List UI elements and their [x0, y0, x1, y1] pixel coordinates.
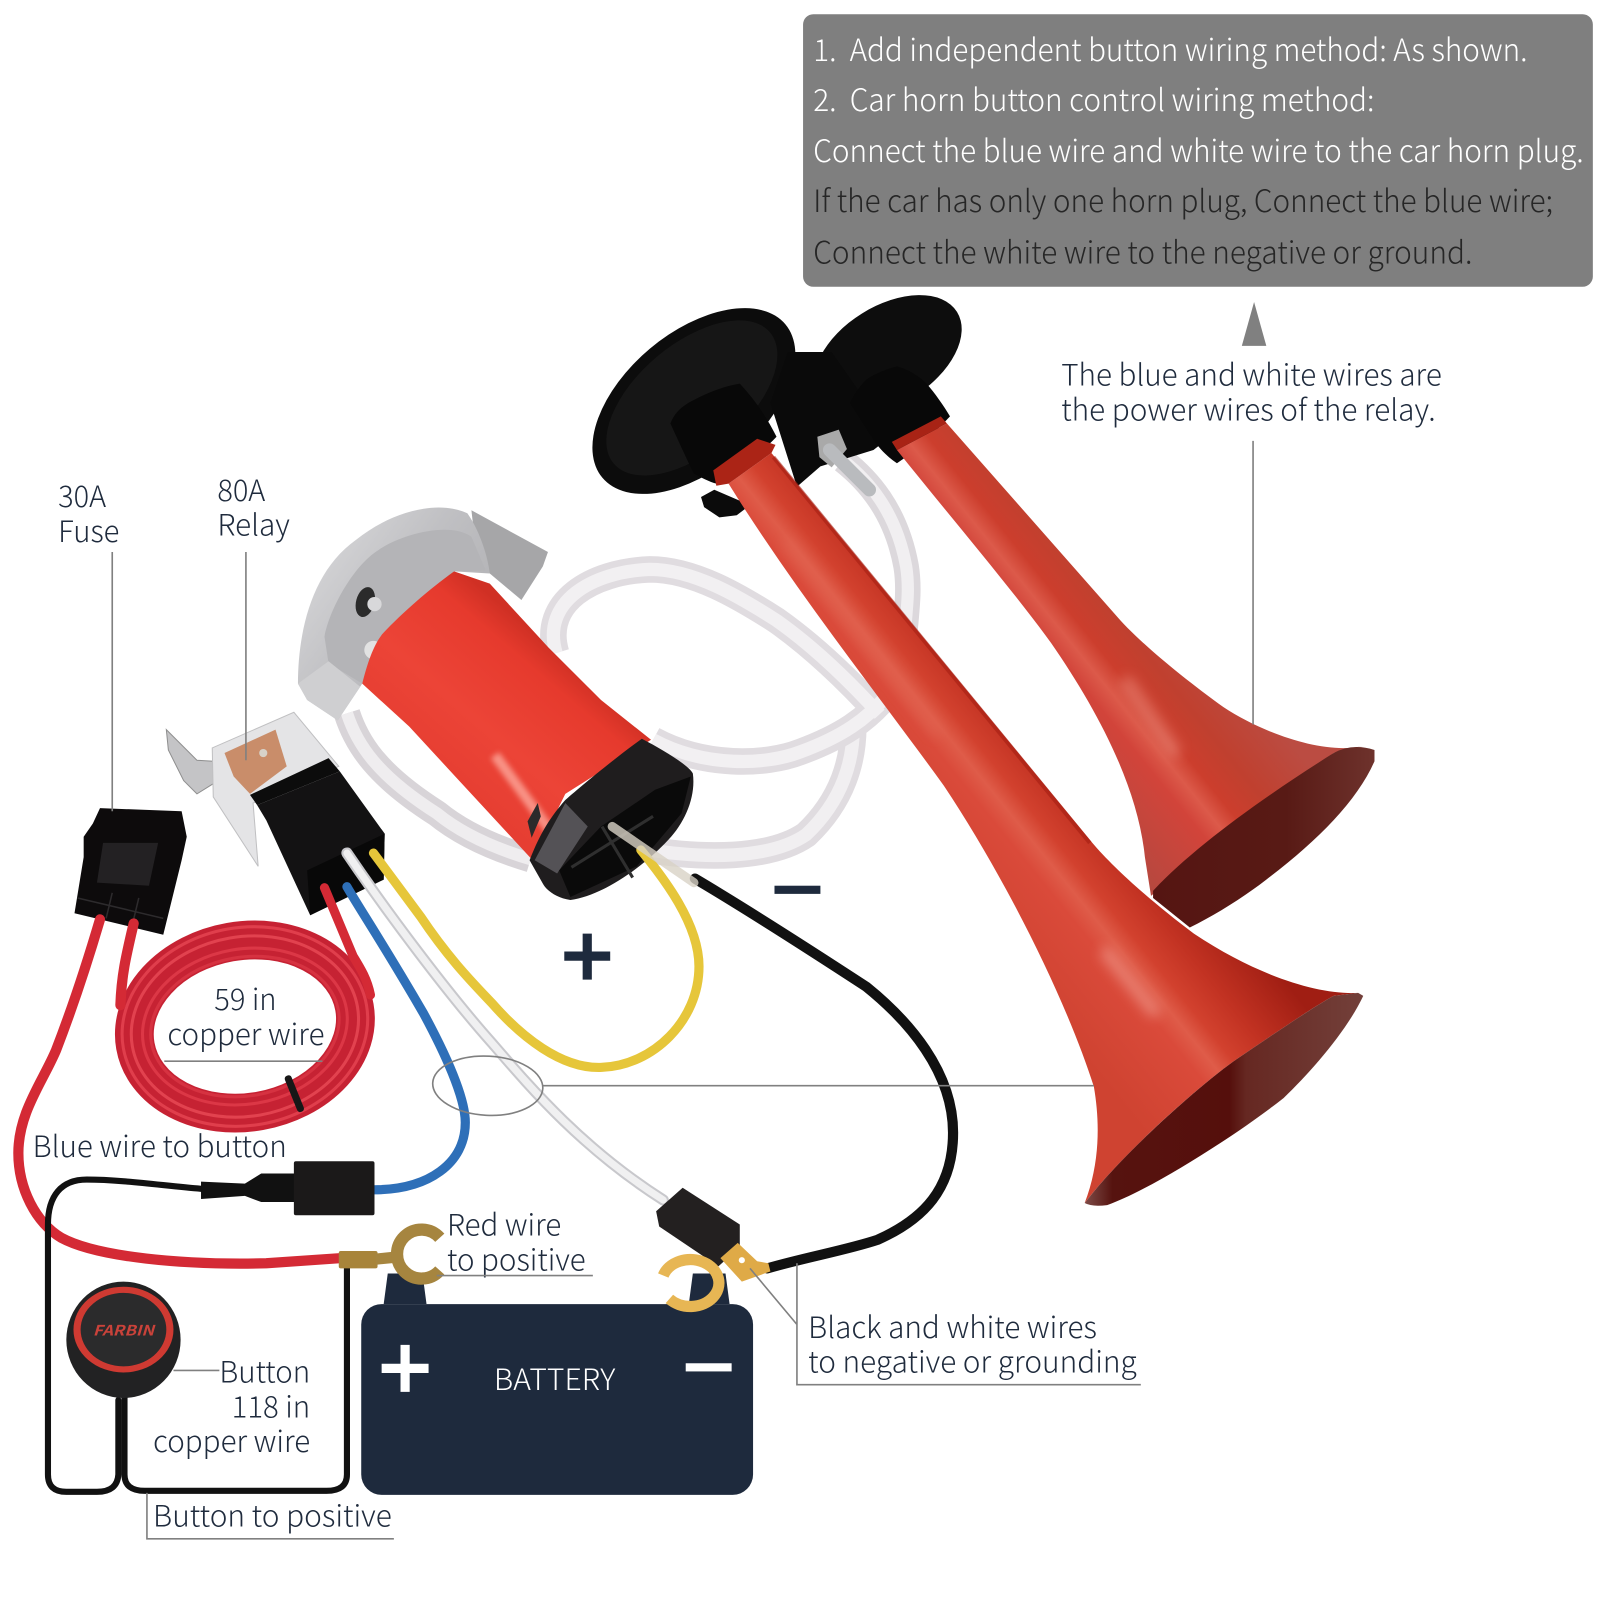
horn: front trumpet	[713, 439, 1363, 1206]
leader: power wires to rear horn	[1252, 441, 1254, 724]
label: 30A fuse	[58, 473, 119, 811]
wire: red from fuse to coil	[120, 923, 134, 1005]
positive ring terminal	[339, 1230, 440, 1279]
battery minus sign	[686, 1363, 732, 1371]
blue wire connector	[201, 1161, 374, 1215]
coil tie	[284, 1074, 305, 1113]
wires	[18, 850, 953, 1492]
fuse holder	[74, 808, 187, 935]
air compressor	[298, 508, 693, 900]
label: red wire to positive: to positive	[447, 1236, 586, 1279]
horn: rear trumpet	[892, 416, 1374, 928]
button	[66, 1282, 181, 1398]
button: FARBIN	[93, 1320, 157, 1341]
wire: red from fuse to terminal	[18, 919, 340, 1264]
wire: red from relay to coil	[324, 888, 370, 995]
label: blue wire to button: Blue wire to button	[33, 1123, 287, 1166]
panel: wiring methods: Connect the white wire to the negative or ground.	[813, 227, 1472, 272]
clear air hose	[347, 460, 908, 859]
label: black and white wires to negative: Black and white wires	[808, 1304, 1097, 1347]
wire: yellow	[373, 850, 699, 1067]
label: power wires of the relay: the power wires of the relay.	[1061, 386, 1436, 429]
wire sheath at compressor	[612, 827, 694, 883]
label: 80A relay: Relay	[217, 502, 290, 545]
red coil: 59 in copper wire	[106, 908, 384, 1145]
label: black and white wires to negative	[750, 1263, 1141, 1385]
loose polarity signs	[564, 886, 820, 980]
wire: white	[347, 853, 663, 1200]
panel: wiring methods: If the car has only one horn plug, Connect the blue wire;	[813, 176, 1553, 221]
label: 30A fuse: Fuse	[58, 508, 119, 551]
label: button 118 in copper wire: Button	[219, 1349, 310, 1392]
label: 80A relay	[217, 467, 290, 760]
panel: wiring methods: Connect the blue wire and white wire to the car horn plug.	[813, 126, 1584, 171]
label: 80A relay: 80A	[217, 467, 266, 510]
horn: black mounting base	[558, 270, 983, 530]
relay	[166, 712, 385, 915]
panel: wiring methods: 2. Car horn button control wiring method:	[813, 75, 1374, 120]
label: button 118 in copper wire: 118 in	[232, 1383, 310, 1426]
label: 59 in copper wire: 59 in	[214, 976, 277, 1019]
wire: black to negative	[695, 879, 953, 1268]
wire: button lead to blue connector	[48, 1180, 201, 1492]
panel: wiring methods	[803, 14, 1593, 287]
label: button 118 in copper wire	[153, 1349, 310, 1461]
label: black and white wires to negative: to negative or grounding	[808, 1338, 1137, 1381]
label: 30A fuse: 30A	[58, 473, 107, 516]
wire: button lead to positive	[124, 1261, 347, 1491]
label: power wires of the relay: The blue and white wires are	[1061, 352, 1442, 395]
negative connector and terminal	[656, 1188, 770, 1306]
label: power wires of the relay	[1061, 352, 1442, 429]
battery	[361, 1273, 753, 1495]
wire: white core	[347, 853, 663, 1200]
wire: blue	[347, 887, 465, 1190]
label: red wire to positive: Red wire	[447, 1202, 561, 1245]
label: red wire to positive	[437, 1202, 593, 1279]
battery plus sign	[382, 1345, 429, 1392]
label: 59 in copper wire	[164, 976, 324, 1061]
label: 59 in copper wire: copper wire	[167, 1011, 324, 1054]
label: button 118 in copper wire: copper wire	[153, 1418, 310, 1461]
panel: wiring methods: 1. Add independent button wiring method: As shown.	[813, 25, 1528, 70]
arrow: pointing up to panel	[1242, 302, 1266, 346]
battery label: BATTERY	[494, 1356, 615, 1399]
label: button to positive: Button to positive	[153, 1493, 392, 1536]
callout: power wire ellipse and leader	[431, 1053, 1094, 1118]
